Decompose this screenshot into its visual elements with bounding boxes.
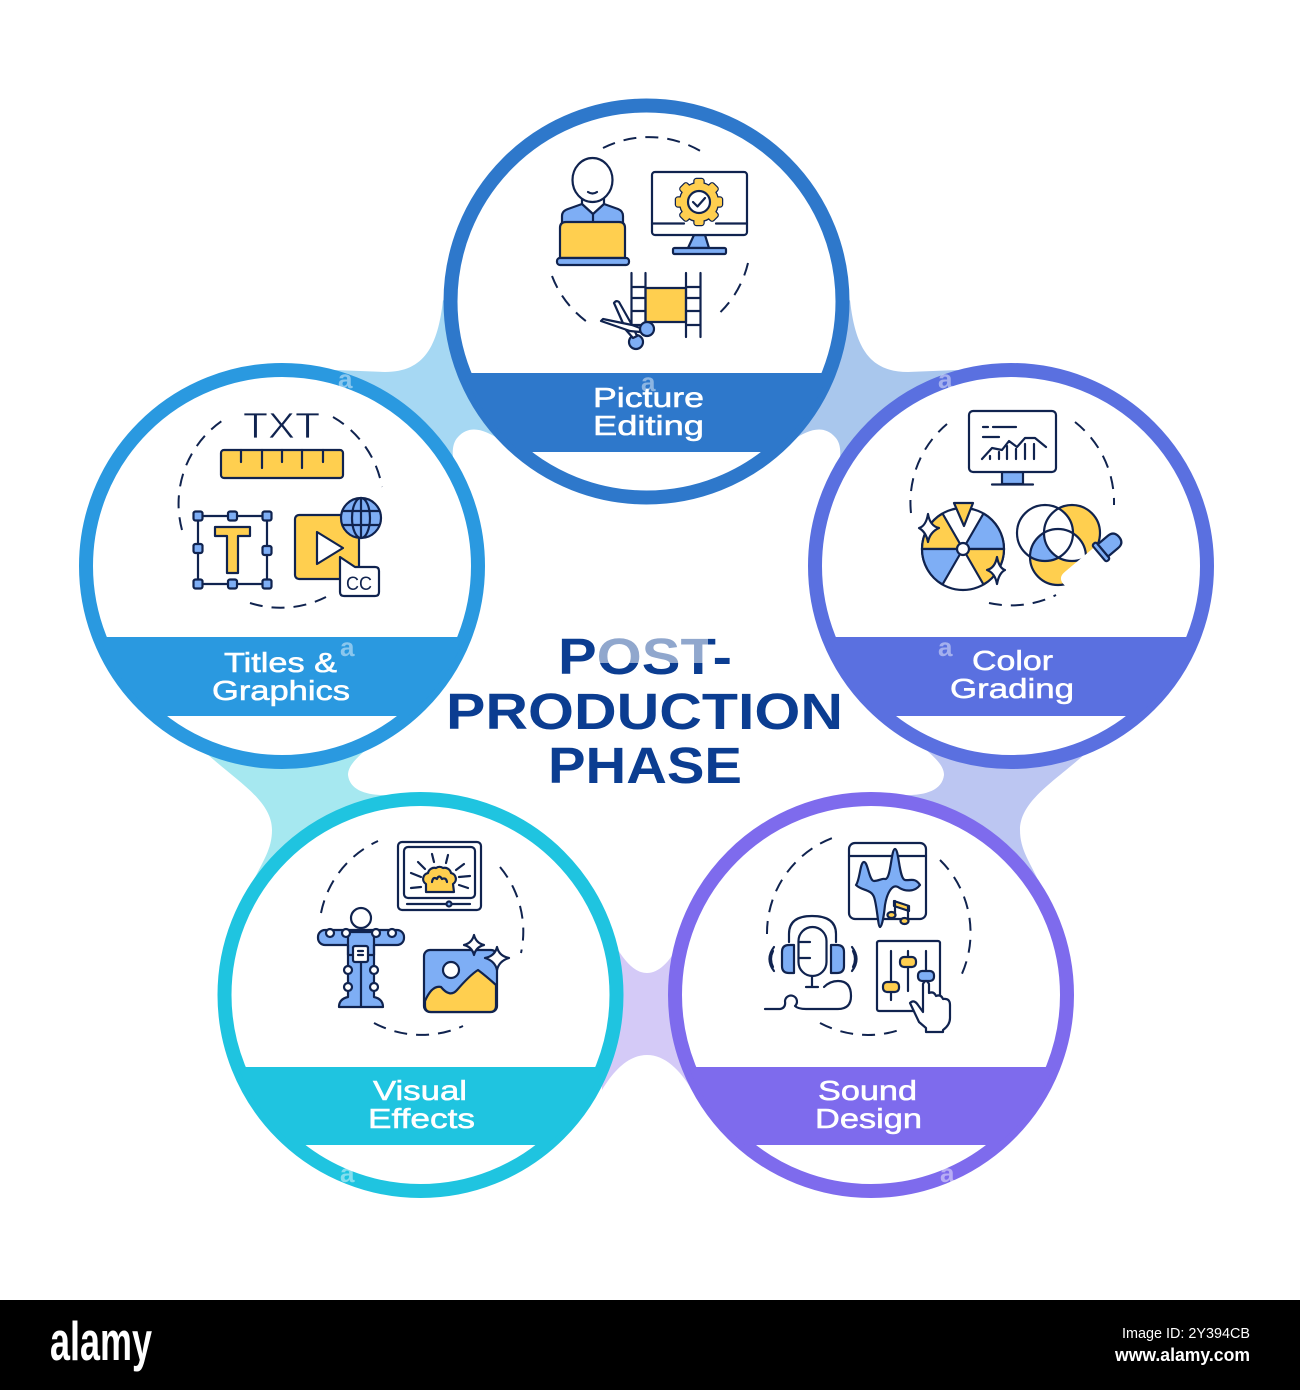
connector: titles to visual effects xyxy=(205,700,392,882)
icon: text box with handles xyxy=(194,512,272,588)
ring xyxy=(86,370,478,762)
icon: video with globe and captions xyxy=(295,498,381,596)
panel: sound design xyxy=(665,799,1085,1191)
ring xyxy=(224,799,616,1191)
panel: titles and graphics xyxy=(76,370,496,762)
text: a xyxy=(641,367,656,397)
icon: film strip xyxy=(632,273,700,337)
title xyxy=(446,628,843,794)
label band xyxy=(836,637,1186,716)
panel: color grading xyxy=(805,370,1225,762)
text: a xyxy=(940,1158,955,1188)
icon: scissors xyxy=(601,301,654,349)
dashed ring xyxy=(321,841,523,1035)
label: Visual xyxy=(373,1075,467,1106)
dashed ring xyxy=(767,836,971,1035)
connector: color grading to sound design xyxy=(900,700,1087,882)
icon: monitor with gear xyxy=(652,172,747,254)
label: Picture xyxy=(593,382,704,413)
icon: editor at laptop xyxy=(557,158,629,265)
label: Graphics xyxy=(212,675,350,706)
panel: visual effects xyxy=(215,799,635,1191)
icon: video with globe and captions: CC xyxy=(346,574,372,595)
label band xyxy=(246,1067,596,1145)
label band xyxy=(696,1067,1046,1145)
text: a xyxy=(340,632,355,662)
footer bar xyxy=(0,1300,1300,1390)
label: Grading xyxy=(950,673,1074,704)
icon: microphone with headphones xyxy=(765,916,856,1009)
label: Color xyxy=(972,645,1053,676)
connector: visual effects to sound design xyxy=(600,945,700,1090)
label band xyxy=(106,637,458,716)
text: a xyxy=(340,1158,355,1188)
icon: ruler xyxy=(221,450,343,478)
connector: picture editing to titles xyxy=(335,300,520,478)
website: www.alamy.com xyxy=(1114,1345,1250,1365)
icon: monitor with graph xyxy=(969,411,1056,484)
connector: picture editing to color grading xyxy=(773,300,958,478)
icon: color wheel xyxy=(919,503,1005,590)
icon: motion capture figure xyxy=(318,908,404,1007)
label: Titles & xyxy=(224,647,337,678)
icon: venn colors with eyedropper xyxy=(1017,505,1126,592)
text: a xyxy=(938,632,953,662)
ring xyxy=(815,370,1207,762)
ring xyxy=(450,106,842,498)
label xyxy=(815,1075,922,1134)
label xyxy=(368,1075,475,1134)
icon: waveform window xyxy=(849,843,926,927)
label: Editing xyxy=(593,410,704,441)
text: a xyxy=(938,364,953,394)
label: Effects xyxy=(368,1103,475,1134)
footer logo: alamy xyxy=(50,1310,152,1372)
label band xyxy=(472,373,822,452)
icon: image with sparkles xyxy=(424,935,509,1012)
label: Design xyxy=(815,1103,922,1134)
image id: Image ID: 2Y394CB xyxy=(1122,1325,1250,1342)
title: POST- xyxy=(558,628,732,685)
dashed ring xyxy=(179,417,382,608)
text: a xyxy=(338,364,353,394)
icon: TXT heading: TXT xyxy=(243,405,320,446)
title: PHASE xyxy=(548,737,742,794)
label: Sound xyxy=(818,1075,917,1106)
panel: picture editing xyxy=(440,106,860,498)
label xyxy=(950,645,1074,704)
ring xyxy=(675,799,1067,1191)
icon: screen with explosion xyxy=(398,842,481,910)
dashed ring xyxy=(910,422,1114,605)
dashed ring xyxy=(552,137,748,324)
label xyxy=(593,382,704,441)
title: PRODUCTION xyxy=(446,683,843,740)
icon: mixer with hand xyxy=(877,941,950,1032)
label xyxy=(212,647,350,706)
